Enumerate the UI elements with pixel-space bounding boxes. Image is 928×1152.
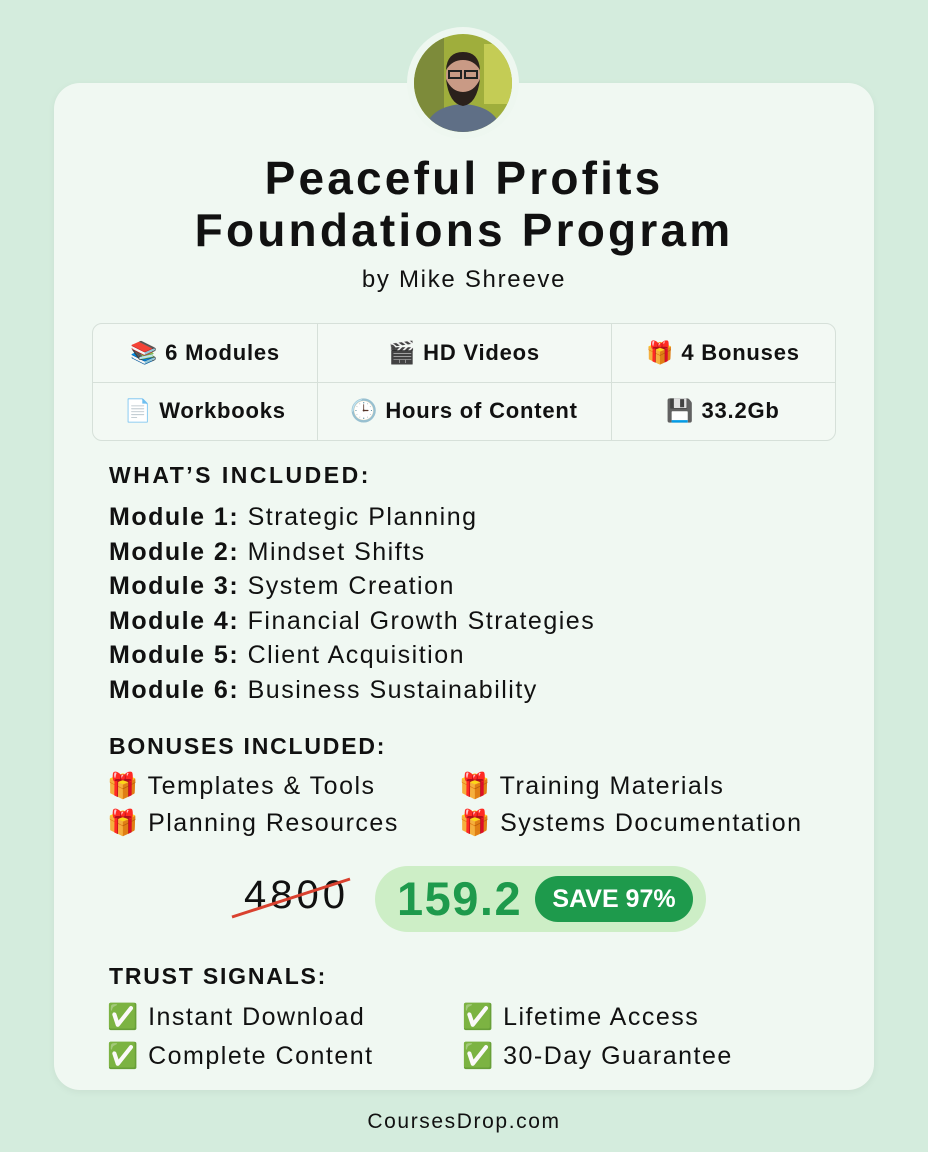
stat: bonuses: 🎁 4 Bonuses [646,340,800,365]
title [195,152,733,256]
bonuses list: 🎁 Planning Resources [107,809,399,837]
trust list: ✅ Instant Download [107,1003,365,1031]
stat: modules: 📚 6 Modules [130,340,280,365]
text: ✅ Lifetime Access [462,1003,699,1031]
module list: Module 6: Business Sustainability [109,676,538,704]
stats table [92,323,836,441]
bonuses list [107,772,399,837]
module list: Module 1: Strategic Planning [109,503,478,531]
stat: videos: 🎬 HD Videos [388,340,540,365]
price pill [375,866,706,932]
title: Foundations Program [195,204,733,256]
trust list [107,1002,374,1070]
text: 🎁 Systems Documentation [459,809,803,837]
footer: CoursesDrop.com [367,1110,561,1133]
module list: Module 2: Mindset Shifts [109,538,426,566]
module list: Module 4: Financial Growth Strategies [109,607,595,635]
stat: workbooks: 📄 Workbooks [124,398,286,423]
price pill: 159.2 [397,872,522,925]
old price: 4800 [244,873,349,917]
module list: Module 3: System Creation [109,572,455,600]
stat: hours: 🕒 Hours of Content [350,398,578,423]
text: 🎁 Training Materials [459,772,724,800]
save badge [535,876,693,922]
trust list: ✅ Complete Content [107,1042,374,1070]
module list: Module 5: Client Acquisition [109,641,465,669]
text: ✅ 30-Day Guarantee [462,1042,733,1070]
trust heading: TRUST SIGNALS: [109,963,327,989]
avatar [407,27,519,139]
save badge: SAVE 97% [552,884,676,912]
bonuses list: 🎁 Templates & Tools [107,772,376,800]
what's included heading: WHAT’S INCLUDED: [109,462,371,488]
card panel [54,83,874,1090]
author: by Mike Shreeve [362,266,566,293]
title: Peaceful Profits [265,152,663,204]
bonuses heading: BONUSES INCLUDED: [109,733,386,759]
stat: size: 💾 33.2Gb [666,398,780,423]
module list [109,503,595,704]
